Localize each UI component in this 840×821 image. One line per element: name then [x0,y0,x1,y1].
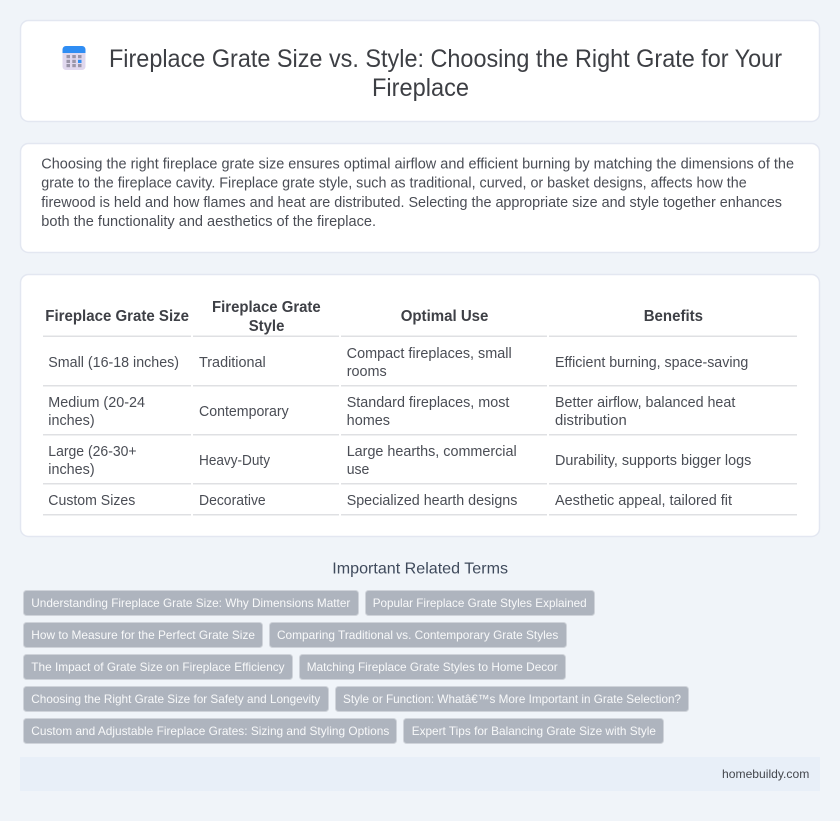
table row: small: rooms [347,364,387,380]
intro paragraph [41,156,794,230]
table row: large [48,444,751,478]
intro panel [20,144,820,252]
table row: custom [48,493,732,509]
table row: large: inches) [48,462,95,478]
table row: large: Large (26-30+ [48,444,137,460]
table row: large: Large hearths, commercial [347,444,517,460]
table row: custom: Aesthetic appeal, tailored fit [555,493,732,509]
tag: The Impact of Grate Size on Fireplace Efficiency [31,660,285,674]
tag [404,718,664,744]
table row: large: use [347,462,369,478]
table row: small: Efficient burning, space-saving [555,355,748,371]
tag: Comparing Traditional vs. Contemporary Grate Styles [277,628,558,642]
table header row: Benefits [644,308,703,325]
table row: small: Compact fireplaces, small [347,346,512,362]
tag [270,622,566,648]
table row: medium: Better airflow, balanced heat [555,395,735,411]
heading: important related terms: Important Related Terms [332,560,508,577]
table row: large: Heavy-Duty [199,453,271,469]
table row: small [48,346,748,380]
panel: comparison table [20,274,820,536]
table header row: Style [249,318,284,335]
tag: Expert Tips for Balancing Grate Size with Style [412,724,656,738]
tag [336,686,688,712]
table row: medium: distribution [555,413,627,429]
tag: Style or Function: Whatâ€™s More Important in Grate Selection? [343,692,681,706]
tag: Choosing the Right Grate Size for Safety and Longevity [31,692,320,706]
header panel [20,20,820,122]
table row: custom: Decorative [199,493,266,509]
icon: calendar grid [62,46,86,70]
table row: medium: Medium (20-24 [48,395,145,411]
tag [24,654,292,680]
related term tags [24,590,688,744]
tag: Understanding Fireplace Grate Size: Why Dimensions Matter [31,596,350,610]
footer source text: homebuildy.com [722,767,809,781]
table header row: Fireplace Grate [212,299,321,316]
table row: custom: Specialized hearth designs [347,493,517,509]
table row: medium: Contemporary [199,404,289,420]
tag: How to Measure for the Perfect Grate Size [31,628,255,642]
tag: Popular Fireplace Grate Styles Explained [373,596,587,610]
table row: large: Durability, supports bigger logs [555,453,751,469]
tag [24,686,328,712]
table row: medium: Standard fireplaces, most [347,395,509,411]
table header row: Optimal Use [401,308,488,325]
table row: custom: Custom Sizes [48,493,135,509]
tag: Matching Fireplace Grate Styles to Home Decor [307,660,558,674]
table row: medium: inches) [48,413,95,429]
title [109,45,782,102]
table header row [45,299,703,335]
table header row: Fireplace Grate Size [45,308,189,325]
tag: Custom and Adjustable Fireplace Grates: Sizing and Styling Options [31,724,389,738]
tag [300,654,566,680]
footer bar [20,757,820,791]
tag [24,718,396,744]
title: Fireplace [372,74,469,102]
intro paragraph: Choosing the right fireplace grate size ensures optimal airflow and efficient burning by matching the dimensions of the [41,156,794,172]
table row: small: Small (16-18 inches) [48,355,179,371]
table row: medium [48,395,735,429]
table row: small: Traditional [199,355,266,371]
table row: medium: homes [347,413,390,429]
intro paragraph: both the functionality and aesthetics of the fireplace. [41,214,376,230]
title: Fireplace Grate Size vs. Style: Choosing the Right Grate for Your [109,45,782,73]
tag [24,622,262,648]
intro paragraph: firewood is held and how flames and heat are distributed. Selecting the appropriate size and style together enhances [41,195,782,211]
intro paragraph: grate to the fireplace cavity. Fireplace grate style, such as traditional, curved, or basket designs, affects how the [41,175,747,191]
tag [24,590,358,616]
tag [366,590,594,616]
